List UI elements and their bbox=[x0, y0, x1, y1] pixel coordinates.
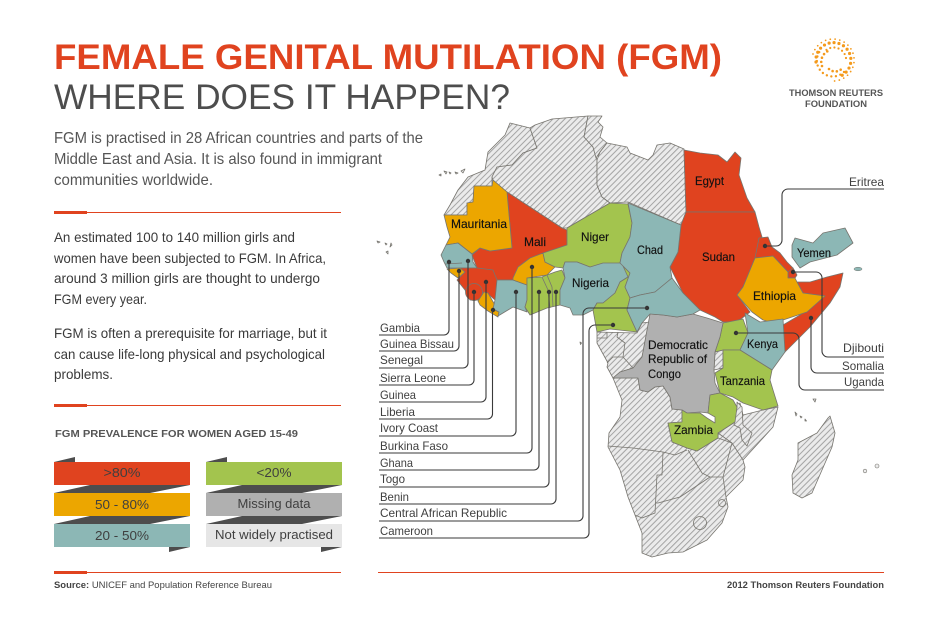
body text: can cause life-long physical and psychological bbox=[54, 347, 325, 362]
leader: Djibouti: Djibouti bbox=[843, 341, 884, 355]
>80%: Sierra Leone bbox=[466, 284, 482, 300]
>80%: Mali bbox=[472, 192, 567, 280]
leader: Burkina Faso bbox=[379, 265, 534, 453]
leader: Guinea bbox=[379, 280, 488, 402]
map country labels: Yemen bbox=[797, 246, 831, 260]
logo: Thomson Reuters Foundation: FOUNDATION bbox=[805, 99, 867, 109]
body text: An estimated 100 to 140 million girls and bbox=[54, 230, 295, 245]
map of Africa bbox=[377, 116, 879, 557]
legend ribbon: right column: Not widely practised bbox=[215, 527, 333, 542]
map country labels: Ethiopia bbox=[753, 289, 796, 303]
20-50%: Ivory Coast bbox=[493, 280, 527, 316]
50-80%: Ethiopia bbox=[737, 256, 825, 323]
leader: Central African Republic bbox=[379, 306, 649, 521]
legend ribbon: left column: 20 - 50% bbox=[95, 528, 149, 543]
legend ribbon: right column: <20% bbox=[256, 465, 292, 480]
50-80%: Mauritania bbox=[444, 180, 512, 254]
body text: FGM is often a prerequisite for marriage, but it bbox=[54, 326, 327, 341]
<20%: Niger bbox=[543, 203, 632, 268]
legend ribbon: right column: Missing data bbox=[238, 496, 311, 511]
intro text bbox=[54, 130, 423, 189]
leader: Senegal: Senegal bbox=[380, 353, 423, 367]
legend ribbon: left column: 50 - 80% bbox=[95, 497, 149, 512]
leader: Somalia bbox=[809, 316, 884, 373]
body text: women have been subjected to FGM. In Africa, bbox=[53, 251, 326, 266]
logo: Thomson Reuters Foundation bbox=[789, 39, 883, 109]
<20%: Tanzania bbox=[715, 350, 778, 410]
title: FEMALE GENITAL MUTILATION (FGM) bbox=[54, 38, 722, 77]
20-50%: Kenya bbox=[740, 313, 785, 370]
copyright note: 2012 Thomson Reuters Foundation bbox=[727, 580, 884, 591]
leader: Benin bbox=[379, 290, 558, 504]
map country labels: Tanzania bbox=[720, 374, 765, 388]
map country labels: Nigeria bbox=[572, 276, 609, 290]
leader lines and country callouts bbox=[379, 175, 884, 538]
20-50%: Chad bbox=[620, 203, 681, 298]
body text: FGM every year. bbox=[54, 292, 147, 307]
leader: Gambia: Gambia bbox=[380, 321, 420, 335]
>80%: Djibouti bbox=[788, 268, 797, 278]
not widely practised countries: south bbox=[597, 322, 835, 557]
map country labels: Egypt bbox=[695, 174, 725, 188]
Socotra bbox=[854, 267, 862, 271]
islands bbox=[377, 169, 879, 473]
20-50%: Nigeria bbox=[560, 262, 628, 315]
leader: Senegal bbox=[379, 259, 470, 368]
leader: Togo bbox=[379, 290, 551, 487]
leader: Benin: Benin bbox=[380, 490, 409, 504]
leader: Uganda: Uganda bbox=[844, 375, 884, 389]
>80%: Somalia bbox=[783, 273, 843, 352]
legend heading: FGM PREVALENCE FOR WOMEN AGED 15-49 bbox=[55, 428, 298, 440]
leader: Liberia: Liberia bbox=[380, 405, 415, 419]
leader: Burkina Faso: Burkina Faso bbox=[380, 439, 448, 453]
<20%: Uganda bbox=[715, 319, 748, 352]
map country labels: Mauritania bbox=[451, 217, 507, 231]
leader: Uganda bbox=[734, 331, 884, 390]
map country labels bbox=[451, 174, 831, 437]
leader: Ghana bbox=[379, 290, 541, 470]
leader: Cameroon: Cameroon bbox=[380, 524, 433, 538]
50-80%: Liberia bbox=[478, 292, 499, 317]
map country labels: Sudan bbox=[702, 250, 735, 264]
leader: Sierra Leone: Sierra Leone bbox=[380, 371, 446, 385]
leader: Ghana: Ghana bbox=[380, 456, 413, 470]
intro text: FGM is practised in 28 African countries and parts of the bbox=[54, 130, 423, 147]
20-50%: Senegal bbox=[441, 243, 477, 268]
not widely practised countries: north bbox=[444, 116, 686, 228]
map country labels: Chad bbox=[637, 243, 663, 257]
<20%: Cameroon bbox=[593, 266, 637, 332]
leader: Cameroon bbox=[379, 323, 615, 538]
source note: Source: UNICEF and Population Reference Bureau bbox=[54, 580, 272, 591]
map country labels: Mali bbox=[524, 235, 546, 249]
leader: Guinea: Guinea bbox=[380, 388, 416, 402]
map country labels: Congo bbox=[648, 367, 681, 381]
legend ribbon: left column: >80% bbox=[104, 465, 141, 480]
map country labels: Niger bbox=[581, 230, 609, 244]
body text: problems. bbox=[54, 367, 113, 382]
intro text: Middle East and Asia. It is also found in immigrant bbox=[54, 151, 383, 168]
map country labels: Kenya bbox=[747, 337, 778, 351]
>80%: Egypt bbox=[684, 150, 755, 212]
map country labels: Republic of bbox=[648, 352, 708, 366]
leader: Ivory Coast: Ivory Coast bbox=[380, 421, 439, 435]
title bbox=[54, 38, 722, 117]
legend ribbon: right column bbox=[206, 457, 342, 552]
leader: Eritrea: Eritrea bbox=[849, 175, 884, 189]
legend ribbon: left column bbox=[54, 457, 190, 552]
50-80%: Gambia bbox=[445, 263, 462, 264]
>80%: Guinea bbox=[457, 268, 497, 300]
20-50%: Central African Republic bbox=[627, 278, 700, 332]
logo: Thomson Reuters Foundation: THOMSON REUTERS bbox=[789, 88, 883, 98]
leader: Guinea Bissau: Guinea Bissau bbox=[380, 337, 454, 351]
map country labels: Zambia bbox=[674, 423, 713, 437]
<20%: Ghana, Togo, Benin bbox=[525, 270, 565, 315]
intro text: communities worldwide. bbox=[54, 172, 213, 189]
leader: Somalia: Somalia bbox=[842, 359, 884, 373]
leader: Eritrea bbox=[763, 175, 884, 248]
>80%: Sudan bbox=[670, 212, 762, 322]
leader: Liberia bbox=[379, 308, 495, 419]
leader: Djibouti bbox=[791, 270, 884, 357]
leader: Gambia bbox=[379, 260, 451, 335]
50-80%: Burkina Faso bbox=[513, 253, 555, 285]
missing data: Democratic Republic of Congo bbox=[613, 314, 723, 413]
50-80%: Guinea Bissau bbox=[447, 268, 465, 278]
leader: Ivory Coast bbox=[379, 290, 518, 436]
leader: Guinea Bissau bbox=[379, 269, 461, 351]
<20%: Zambia bbox=[668, 393, 737, 451]
title: WHERE DOES IT HAPPEN? bbox=[54, 78, 510, 117]
body text bbox=[53, 230, 327, 382]
legend bbox=[54, 428, 342, 552]
leader: Sierra Leone bbox=[379, 290, 476, 385]
leader: Central African Republic: Central African Republic bbox=[380, 506, 507, 520]
map country labels: Democratic bbox=[648, 338, 708, 352]
body text: around 3 million girls are thought to undergo bbox=[54, 271, 320, 286]
>80%: Eritrea bbox=[755, 237, 793, 272]
icon: orange dotted spiral bbox=[813, 39, 854, 81]
20-50%: Yemen bbox=[792, 228, 853, 268]
leader: Togo: Togo bbox=[380, 472, 405, 486]
